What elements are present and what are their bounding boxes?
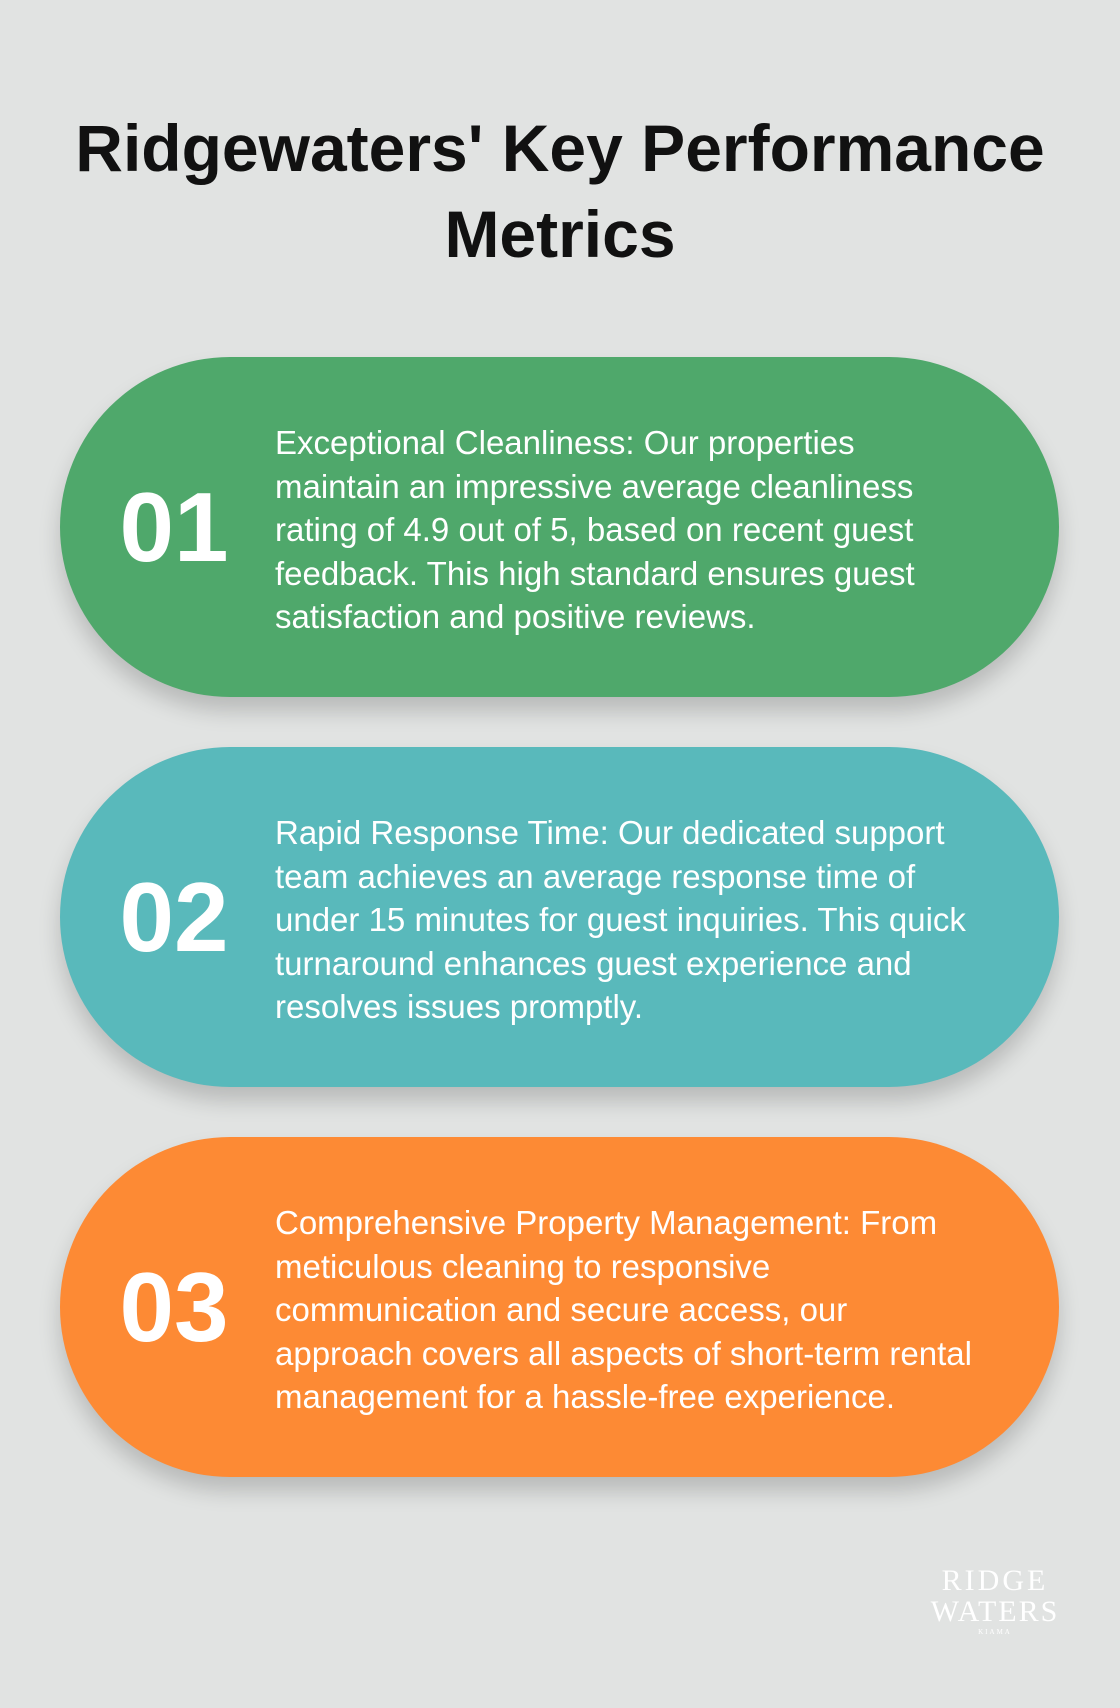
title	[75, 111, 1045, 271]
logo	[930, 1564, 1059, 1636]
text: response time: team achieves an average response time of	[275, 858, 915, 895]
text: response time: under 15 minutes for guest inquiries. This quick	[275, 901, 966, 938]
text: cleanliness	[275, 424, 915, 635]
text: cleanliness: Exceptional Cleanliness: Our properties	[275, 424, 855, 461]
number 02: 02	[119, 862, 228, 972]
text: response time: turnaround enhances guest experience and	[275, 945, 912, 982]
title: Metrics	[444, 197, 676, 271]
text: property management: management for a hassle-free experience.	[275, 1378, 895, 1415]
text: response time: resolves issues promptly.	[275, 988, 643, 1025]
text: cleanliness: rating of 4.9 out of 5, based on recent guest	[275, 511, 913, 548]
panel: property management	[60, 1137, 1059, 1477]
text: property management: meticulous cleaning to responsive	[275, 1248, 770, 1285]
panel: response time	[60, 747, 1059, 1087]
panel: cleanliness	[60, 357, 1059, 697]
number 03: 03	[119, 1252, 228, 1362]
number 01: 01	[119, 472, 228, 582]
text: property management: Comprehensive Property Management: From	[275, 1204, 937, 1241]
text: response time	[275, 814, 966, 1025]
text: cleanliness: satisfaction and positive reviews.	[275, 598, 756, 635]
logo: KIAMA	[978, 1628, 1012, 1636]
text: response time: Rapid Response Time: Our dedicated support	[275, 814, 945, 851]
text: property management	[275, 1204, 972, 1415]
text: cleanliness: feedback. This high standard ensures guest	[275, 555, 915, 592]
title: Ridgewaters' Key Performance	[75, 111, 1045, 185]
text: property management: communication and secure access, our	[275, 1291, 847, 1328]
text: cleanliness: maintain an impressive average cleanliness	[275, 468, 913, 505]
logo: RIDGE	[942, 1564, 1048, 1597]
logo: WATERS	[931, 1595, 1059, 1628]
text: property management: approach covers all aspects of short-term rental	[275, 1335, 972, 1372]
